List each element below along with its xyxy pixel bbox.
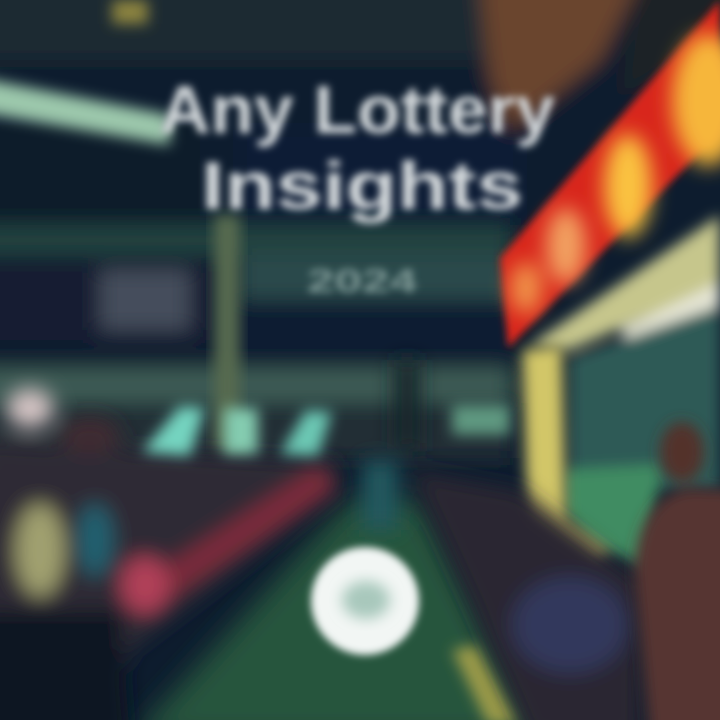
crowd right (362, 360, 640, 720)
person at right (634, 422, 720, 720)
logo badge (311, 547, 419, 655)
subtitle: 2024 (307, 263, 417, 299)
title: Insights (201, 148, 523, 224)
teal lights (142, 405, 510, 456)
title (159, 72, 555, 224)
yellow pillar (522, 345, 610, 566)
central pillar (214, 215, 240, 450)
sign: red lottery banner (500, 0, 720, 348)
floor line (452, 645, 520, 720)
awning and interior (530, 215, 720, 570)
light green band, upper left (0, 0, 170, 145)
sign lights (510, 34, 720, 314)
floor: green aisle (130, 500, 540, 720)
title: Any Lottery (159, 72, 555, 148)
crowd left (0, 388, 340, 720)
